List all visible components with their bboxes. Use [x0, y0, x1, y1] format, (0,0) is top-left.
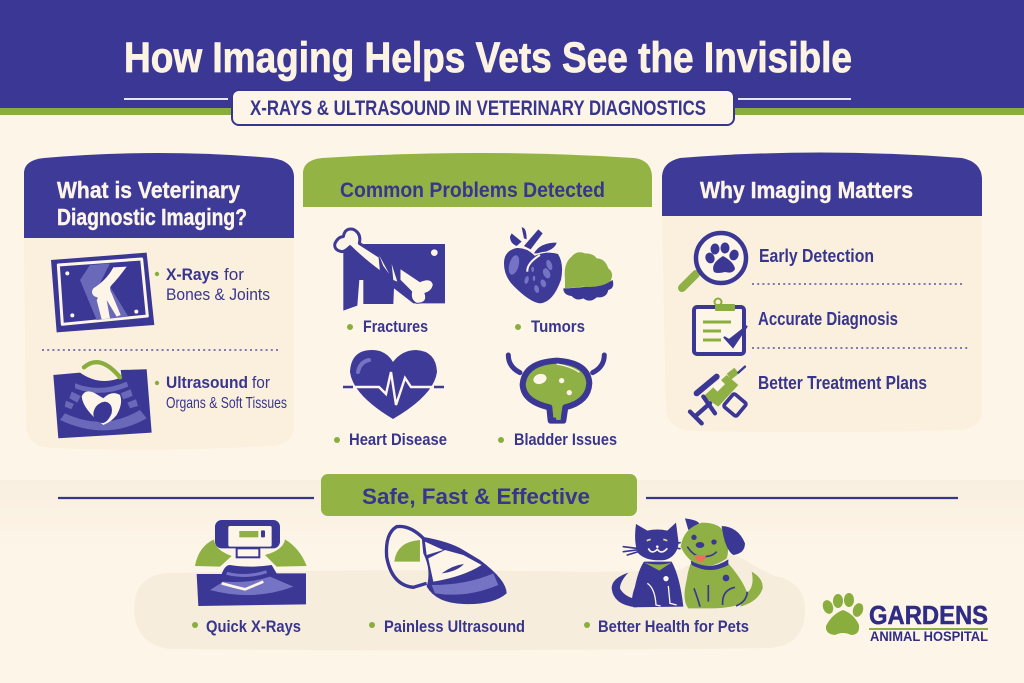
cat	[612, 523, 683, 607]
panel heading: Diagnostic Imaging?	[57, 204, 247, 230]
label: tumors: Tumors	[531, 317, 585, 336]
icon: syringe	[690, 367, 747, 423]
label: fractures	[347, 317, 428, 336]
title: How Imaging Helps Vets See the Invisible	[124, 34, 852, 82]
text: ultrasound	[155, 373, 287, 412]
icon: magnifier with paw	[682, 233, 746, 288]
text: better treatment plans: Better Treatment Plans	[758, 373, 927, 393]
panel heading: Why Imaging Matters	[700, 177, 913, 203]
logo: gardens animal hospital	[821, 593, 988, 644]
icon: clipboard	[694, 298, 747, 354]
logo: gardens animal hospital: GARDENS	[869, 600, 988, 630]
text: ultrasound: Ultrasound	[166, 373, 248, 392]
icon: tumors	[503, 227, 613, 304]
panel: why imaging matters	[662, 152, 982, 432]
panel: safe fast effective	[58, 474, 958, 650]
icon: paw	[821, 593, 865, 635]
label: bladder issues: Bladder Issues	[514, 430, 617, 449]
label: better health for pets: Better Health for Pets	[598, 617, 749, 636]
icon: ultrasound scan of heart	[53, 362, 152, 438]
panel heading: Common Problems Detected	[340, 179, 605, 202]
logo: gardens animal hospital: ANIMAL HOSPITAL	[870, 629, 988, 644]
section heading pill: Safe, Fast & Effective	[362, 484, 590, 509]
panel: common problems detected	[303, 153, 652, 449]
icon: cat and dog	[612, 518, 763, 608]
icon: quick x-ray machine	[195, 520, 307, 606]
panel heading: What is Veterinary	[57, 177, 240, 203]
dog	[681, 518, 763, 608]
label: heart disease: Heart Disease	[349, 430, 447, 449]
label: quick x-rays: Quick X-Rays	[206, 617, 301, 636]
subtitle pill: X-RAYS & ULTRASOUND IN VETERINARY DIAGNOSTICS	[250, 97, 706, 120]
text: x-rays: for	[224, 265, 244, 284]
header banner	[0, 0, 1024, 115]
text: x-rays: X-Rays	[166, 265, 219, 284]
icon: heart with ecg	[343, 350, 444, 419]
text: accurate diagnosis: Accurate Diagnosis	[758, 309, 898, 329]
panel heading	[57, 177, 247, 230]
panel: what is veterinary diagnostic imaging	[24, 153, 294, 450]
icon: x-ray film of knee	[51, 253, 154, 332]
text: x-rays: Bones & Joints	[166, 285, 270, 304]
icon: fracture	[335, 229, 445, 311]
icon: bladder	[508, 355, 604, 421]
subtitle pill	[232, 90, 734, 125]
text: ultrasound: for	[252, 373, 270, 392]
text: early detection: Early Detection	[759, 246, 874, 266]
section heading pill	[321, 474, 637, 516]
text: ultrasound: Organs & Soft Tissues	[166, 395, 287, 412]
text: x-rays	[155, 265, 270, 304]
label: painless ultrasound: Painless Ultrasound	[384, 617, 525, 636]
icon: ultrasound probe	[386, 526, 507, 604]
label: fractures: Fractures	[363, 317, 428, 336]
